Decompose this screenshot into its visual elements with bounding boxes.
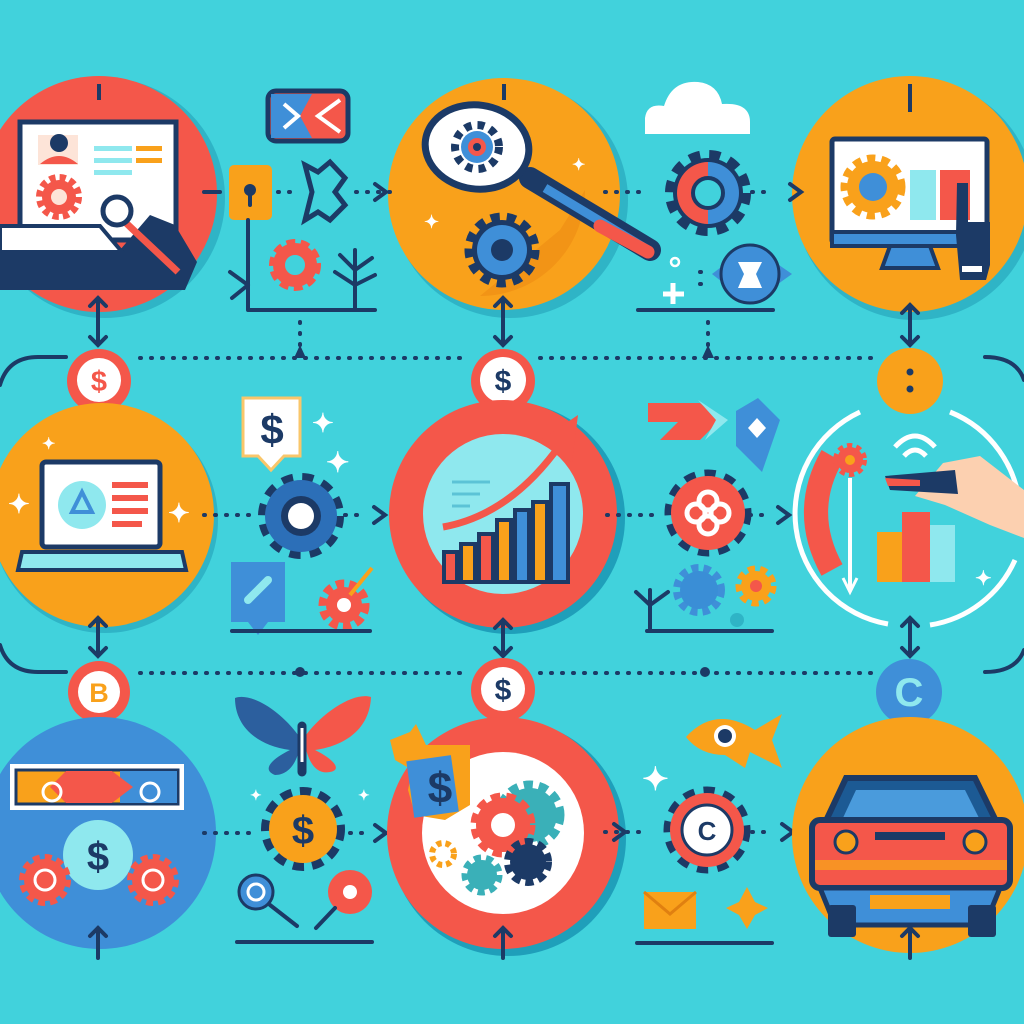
panel: bottom center red ring with gears: $	[428, 764, 452, 813]
panel: top center orange circle with magnifier: ✦	[572, 157, 585, 174]
icon group: middle left connector with dollar tag and gear: $	[260, 406, 284, 453]
panel: top center orange circle with magnifier	[388, 78, 650, 318]
badge: red dollar coin row one: $	[91, 366, 107, 398]
icon: cloud	[645, 82, 750, 134]
panel: bottom left blue circle with banner and coins	[0, 717, 216, 949]
icon group: bottom left connector with butterfly and gear: $	[292, 809, 314, 853]
icon group: middle right connector with arrow and gear	[607, 398, 789, 631]
badge: bitcoin coin	[68, 661, 130, 723]
arrows: vertical links row two	[90, 618, 918, 677]
panel: top right orange circle with monitor	[792, 76, 1024, 320]
badge: red dollar coin row one	[67, 349, 131, 413]
panel: middle left orange circle with laptop: ✦	[168, 498, 190, 528]
icon group: top right connector with gear and badge	[605, 155, 801, 310]
icon group: middle left connector with dollar tag and gear: ✦	[312, 408, 334, 438]
badge: blue letter coin	[876, 659, 942, 725]
panel: bottom left blue circle with banner and coins: $	[87, 835, 109, 879]
icon: envelope badge	[268, 91, 348, 141]
icon group: bottom left connector with butterfly and gear	[204, 696, 386, 942]
icon group: bottom right connector with fish, gear, envelope	[605, 714, 793, 943]
icon group: bottom left connector with butterfly and gear: ✦	[358, 787, 370, 803]
icon group: middle left connector with dollar tag and gear: ✦	[326, 447, 349, 478]
panel: bottom center red ring with gears	[387, 717, 626, 956]
icon group: bottom right connector with fish, gear, envelope: C	[698, 816, 717, 846]
panel: middle center red circle with bar chart	[389, 400, 625, 634]
icon group: top left connector with orange tag, leaf and gear	[204, 162, 400, 310]
panel: middle left orange circle with laptop: ✦	[8, 489, 30, 519]
badge: blue letter coin: C	[895, 671, 923, 715]
badge: center dollar coin row two	[471, 658, 535, 722]
badge: bitcoin coin: B	[89, 678, 109, 708]
badge: center dollar coin row one: $	[495, 365, 512, 398]
panel: top center orange circle with magnifier: ✦	[424, 212, 439, 232]
icon group: bottom left connector with butterfly and gear: ✦	[250, 787, 262, 803]
panel: middle left orange circle with laptop: ✦	[42, 436, 55, 453]
panel: middle right white ring with hand and chart: ✦	[975, 568, 992, 590]
panel: top left red circle with screen	[0, 76, 225, 318]
icon group: bottom right connector with fish, gear, envelope: ✦	[642, 761, 669, 797]
badge: center dollar coin row two: $	[495, 674, 512, 707]
icon group: middle left connector with dollar tag and gear	[204, 398, 385, 635]
panel: bottom right orange circle with car	[792, 717, 1024, 953]
badge: center dollar coin row one	[471, 349, 535, 413]
panel: middle right white ring with hand and chart	[795, 412, 1024, 625]
arrows: vertical links row one	[90, 298, 918, 358]
panel: middle left orange circle with laptop	[0, 403, 218, 633]
arrows: bottom vertical links	[90, 928, 918, 958]
badge: orange dots coin	[877, 348, 943, 414]
